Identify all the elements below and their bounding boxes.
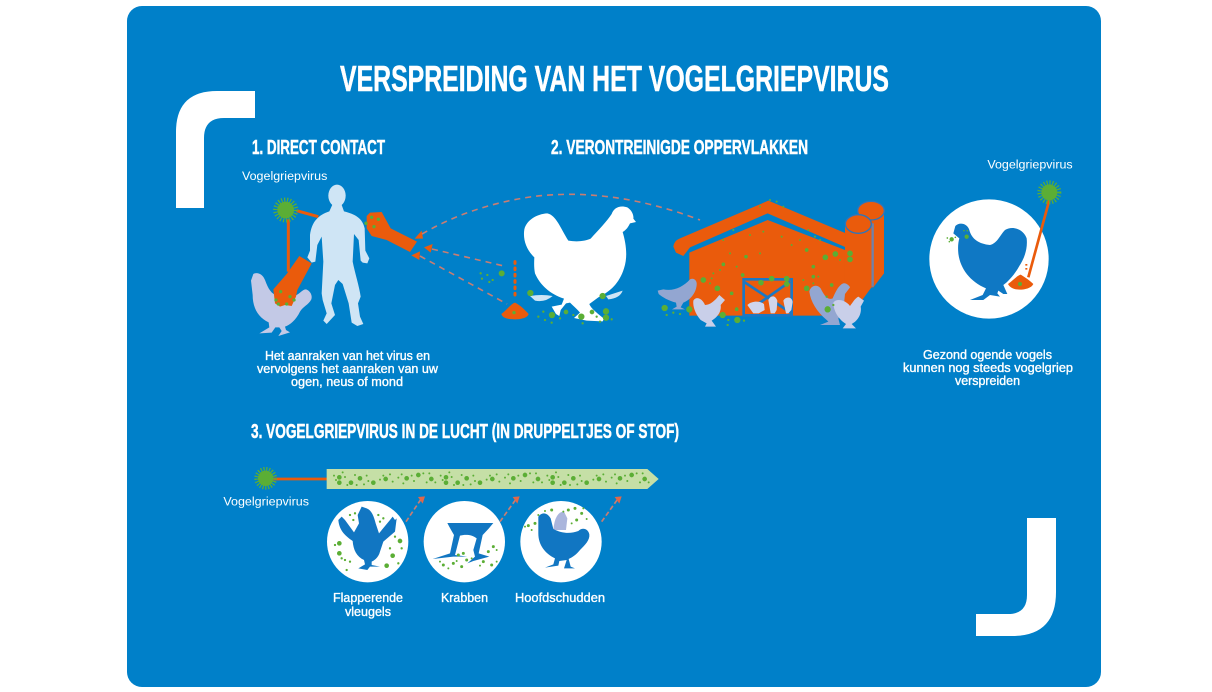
section 1 illustration: direct contact bbox=[242, 169, 433, 336]
captions: behaviour: Krabben bbox=[441, 591, 488, 605]
connector lines bbox=[288, 211, 318, 272]
falling drops bbox=[1023, 264, 1029, 271]
panel: blue background bbox=[127, 6, 1101, 687]
caption: direct contact: Het aanraken van het virus en bbox=[265, 349, 430, 363]
feathers bbox=[530, 291, 623, 301]
section 3 illustration: airborne bbox=[223, 469, 659, 582]
band arrow of droplets bbox=[327, 469, 659, 489]
icon: barn silos bbox=[845, 201, 884, 317]
dashed arrows to glove bbox=[420, 194, 700, 304]
virus on glove bbox=[276, 292, 294, 304]
connector line bbox=[273, 475, 327, 483]
virus on barn bbox=[703, 200, 850, 309]
icon: virus bbox=[276, 200, 296, 220]
caption: direct contact: ogen, neus of mond bbox=[291, 375, 403, 389]
heading: contaminated surfaces: 2. VERONTREINIGDE OPPERVLAKKEN bbox=[551, 137, 808, 159]
virus near beak bbox=[952, 237, 967, 239]
heading: direct contact: 1. DIRECT CONTACT bbox=[252, 137, 385, 159]
icon: contaminated pile bbox=[1008, 275, 1033, 290]
caption: direct contact: vervolgens het aanraken van uw bbox=[257, 362, 439, 376]
virus on raised glove bbox=[366, 217, 378, 227]
circle: flapping wings bbox=[327, 501, 408, 582]
captions: behaviour bbox=[333, 591, 605, 619]
caption: healthy looking birds bbox=[903, 348, 1073, 388]
icon: hen bbox=[251, 273, 312, 336]
caption: healthy looking birds: Gezond ogende vogels bbox=[923, 348, 1052, 362]
hens in front of barn bbox=[658, 279, 864, 328]
circle: head shaking bbox=[520, 501, 602, 582]
label: virus: Vogelgriepvirus bbox=[987, 157, 1073, 171]
small dots near beak bbox=[947, 231, 967, 242]
green droppings around hen bbox=[530, 293, 612, 323]
decorative bracket: bottom right bbox=[976, 518, 1056, 636]
white circle bbox=[929, 199, 1049, 319]
icon: blue hen bbox=[953, 224, 1027, 300]
decorative bracket: top left bbox=[176, 91, 255, 208]
virus dust and pile bbox=[481, 262, 529, 319]
title: VERSPREIDING VAN HET VOGELGRIEPVIRUS bbox=[340, 58, 889, 99]
captions: behaviour: Flapperende bbox=[333, 591, 403, 605]
label: virus: Vogelgriepvirus bbox=[242, 169, 327, 183]
icon: large white hen bbox=[524, 206, 636, 321]
captions: behaviour: vleugels bbox=[345, 605, 391, 619]
label: virus: Vogelgriepvirus bbox=[223, 495, 309, 509]
icon: virus bbox=[1040, 183, 1059, 202]
caption: healthy looking birds: kunnen nog steeds vogelgriep bbox=[903, 361, 1073, 375]
icon: glove on hen bbox=[273, 256, 312, 307]
captions: behaviour: Hoofdschudden bbox=[515, 591, 605, 605]
caption: healthy looking birds: verspreiden bbox=[955, 374, 1020, 388]
icon: barn roof bbox=[673, 201, 846, 256]
virus near hens bbox=[665, 297, 833, 325]
connector line bbox=[1028, 200, 1049, 277]
icon: barn door bbox=[744, 279, 792, 315]
icon: raised glove bbox=[367, 212, 417, 252]
section 2 illustration: hen and barn bbox=[481, 200, 884, 328]
chicks in door bbox=[747, 296, 793, 313]
section: healthy looking birds bbox=[929, 157, 1073, 319]
virus in pile bbox=[1014, 278, 1026, 290]
icon: virus bbox=[257, 469, 275, 487]
droplets in band bbox=[334, 472, 649, 485]
circle: scratching bbox=[424, 501, 505, 582]
arrowheads bbox=[411, 231, 433, 260]
icon: barn body bbox=[689, 220, 845, 316]
caption: direct contact bbox=[257, 349, 439, 389]
heading: airborne virus: 3. VOGELGRIEPVIRUS IN DE LUCHT (IN DRUPPELTJES OF STOF) bbox=[251, 421, 679, 443]
icon: person bbox=[307, 185, 369, 326]
dashed arrows bbox=[406, 496, 622, 522]
